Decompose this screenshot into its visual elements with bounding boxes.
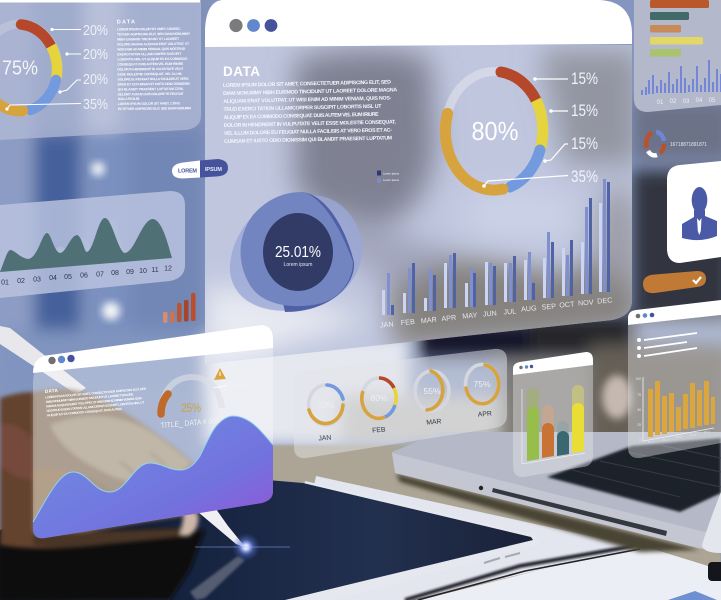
- capsule bars: [527, 385, 584, 461]
- small orange bars: [163, 293, 196, 323]
- laptop: [392, 432, 721, 581]
- data text block: NULLA FACILISI.: [118, 97, 140, 101]
- small donut with number: 16718871891871: [670, 142, 707, 148]
- month labels: SEP: [541, 301, 557, 312]
- main glass body: [205, 45, 640, 370]
- month numbers: 08: [111, 270, 119, 277]
- lorem ipsum paragraph: ALIQUIP EX EA COMMODO CONSEQUAT. DUIS AUTEM VEL EUM IRIURE: [224, 112, 379, 121]
- month labels: AUG: [521, 303, 537, 314]
- blob chart 25.01%: Lorem ipsum: [284, 262, 312, 268]
- month numbers: 03: [33, 276, 41, 284]
- month numbers: 01: [1, 280, 9, 286]
- data text block: DATA: [117, 19, 135, 26]
- month numbers: 09: [126, 269, 134, 276]
- month numbers: 05: [64, 274, 72, 281]
- month numbers: 11: [151, 267, 159, 274]
- axis numbers: 04: [696, 98, 703, 104]
- donut values: 80%: [370, 393, 388, 403]
- legend: [377, 170, 400, 183]
- lorem ipsum paragraph: TRUD EXERCI TATION ULLAMCORPER SUSCIPIT LOBORTIS NISL UT: [223, 104, 382, 113]
- month numbers: 04: [49, 275, 57, 282]
- data text block: WISI ENIM AD MINIM VENIAM, QUIS NOSTRUD: [117, 47, 186, 51]
- donut leaders and percentages: 20%: [83, 23, 108, 39]
- axis numbers: 02: [670, 99, 677, 105]
- gauge title: TITLE_ DATA # 001: [160, 416, 220, 430]
- area outline: [33, 416, 273, 522]
- data text: DIAM NONUMMY NIBH EUISMOD TINCIDUNT UT LAOREET DOLORE: [46, 392, 134, 404]
- panel: teal area chart: [0, 191, 185, 298]
- data text block: EROS ET ACCUMSAN ET IUSTO ODIO DIGNISSIM: [118, 82, 190, 86]
- mini bar chart: [641, 60, 721, 95]
- monthly bar chart: [380, 179, 613, 330]
- window dots: [48, 355, 75, 364]
- month numbers: 12: [164, 266, 172, 272]
- value 100010: 100010: [228, 381, 248, 389]
- donut values: 55%: [423, 386, 441, 396]
- data text block: ECTETUER ADIPISCING ELIT, SED DIAM NONUMM: [118, 106, 191, 111]
- data text block: NIBH EUISMOD TINCIDUNT UT LAOREET: [117, 37, 179, 41]
- hand: [0, 389, 198, 548]
- header bar: [205, 0, 632, 47]
- axis numbers: 01: [657, 100, 664, 106]
- month labels: NOV: [578, 297, 594, 308]
- legend: Lorem ipsum: [383, 172, 400, 176]
- axis: [522, 389, 585, 464]
- data text: ALIQUIP EX EA COMMODO CONSEQUAT. DUIS AUTEM: [47, 407, 122, 417]
- small donut with number: [646, 132, 707, 155]
- month labels: MAY: [462, 310, 478, 321]
- gold bars: [648, 381, 715, 437]
- window dots: [636, 313, 654, 318]
- area series back: [0, 219, 172, 272]
- panel: monthly donuts: [294, 349, 507, 458]
- header bar: [33, 325, 273, 373]
- gauge: [160, 377, 222, 416]
- donut leaders and percentages: 15%: [571, 134, 598, 153]
- dark bars: [391, 182, 610, 315]
- stylus: [0, 326, 246, 548]
- data text block: DOLOR IN HENDRERIT IN VULPUTATE VELIT: [117, 67, 183, 71]
- donut leaders and percentages: 35%: [83, 97, 108, 113]
- data text block: LOREM IPSUM DOLOR SIT AMET, CONS: [118, 101, 181, 106]
- month labels: JAN: [318, 434, 332, 443]
- lorem ipsum paragraph: CUMSAN ET IUSTO ODIO DIGNISSIM QUI BLANDIT PRAESENT LUPTATUM: [224, 135, 392, 145]
- donut leaders and percentages: [482, 69, 598, 188]
- light bars: [382, 203, 602, 315]
- lorem ipsum paragraph: VEL ILLUM DOLORE EU FEUGIAT NULLA FACILISIS AT VERO EROS ET AC-: [224, 127, 392, 137]
- data text: DATA: [45, 388, 59, 394]
- data text block: DOLORE EU FEUGIAT NULLA FACILISIS AT VERO: [117, 77, 189, 81]
- blob chart 25.01%: [230, 192, 363, 312]
- axis numbers: 25: [637, 423, 641, 427]
- month labels: JUN: [482, 308, 497, 319]
- data text: LOREM IPSUM DOLOR SIT AMET, CONSECTETUER ADIPISCING ELIT, SED: [45, 387, 147, 399]
- legend: Lorem ipsum: [383, 178, 400, 182]
- data text block: QUI BLANDIT PRAESENT LUPTATUM ZZRIL: [118, 87, 184, 91]
- month labels: APR: [478, 410, 492, 419]
- window dots: [229, 19, 277, 32]
- tick labels: PT. 1: [648, 440, 655, 444]
- axis numbers: 05: [709, 98, 716, 104]
- stylus glow: [195, 533, 290, 561]
- blob chart 25.01%: 25.01%: [275, 244, 321, 261]
- header bar: [513, 352, 593, 375]
- horizontal bars: [650, 0, 709, 56]
- donut leaders and percentages: 20%: [83, 72, 108, 88]
- lorem ipsum toggle pill: IPSUM: [205, 167, 222, 173]
- tablet: [0, 470, 539, 600]
- month labels: MAR: [426, 418, 442, 427]
- month labels: FEB: [400, 317, 415, 327]
- donut JAN: [308, 385, 344, 425]
- month labels: DEC: [597, 295, 613, 306]
- finger tones inside window: [33, 389, 198, 534]
- tick labels: PT. 4: [690, 433, 697, 437]
- area series front: [0, 218, 172, 272]
- donut leaders and percentages: [5, 23, 108, 113]
- month numbers: 06: [80, 272, 88, 280]
- donut values: 75%: [473, 379, 491, 389]
- axis: [643, 377, 714, 441]
- tick labels: [648, 430, 711, 444]
- donut leaders and percentages: 35%: [571, 167, 598, 186]
- donut chart 80%: [445, 72, 543, 190]
- lorem ipsum toggle pill: [172, 159, 228, 178]
- profile card: [667, 161, 721, 263]
- header bar: [628, 300, 721, 325]
- desk and paper: [270, 445, 721, 600]
- donut MAR: [415, 371, 449, 411]
- month labels: [380, 295, 613, 330]
- panel: main dashboard window: [205, 0, 640, 370]
- axis numbers: [636, 377, 641, 442]
- axis numbers: 50: [637, 408, 641, 412]
- data text block: TETUER ADIPISCING ELIT, SED DIAM NONUMMY: [117, 32, 191, 36]
- lorem ipsum paragraph: DOLOR IN HENDRERIT IN VULPUTATE VELIT ESSE MOLESTIE CONSEQUAT,: [224, 119, 396, 129]
- data text block: DOLORE MAGNA ALIQUAM ERAT VOLUTPAT. UT: [117, 42, 189, 46]
- lorem ipsum paragraph: DIAM NONUMMY NIBH EUISMOD TINCIDUNT UT LAOREET DOLORE MAGNA: [223, 87, 397, 97]
- month labels: MAR: [420, 315, 437, 325]
- data text block: [117, 19, 192, 111]
- panel: gold bar window: [628, 300, 721, 458]
- donut chart 75%: [0, 24, 58, 112]
- data text: MAGNA ALIQUAM ERAT VOLUTPAT. UT WISI ENIM AD MINIM VENIAM, QUIS: [46, 396, 142, 408]
- leader to 100010: [213, 386, 227, 388]
- data text block: LOREM IPSUM DOLOR SIT AMET, CONSEC-: [117, 27, 181, 31]
- mid bars: [387, 179, 606, 315]
- month labels: FEB: [372, 426, 386, 435]
- donut values: [317, 379, 491, 410]
- lorem ipsum paragraph: [223, 79, 398, 145]
- panel: bottom left window: [33, 325, 273, 538]
- axis numbers: 0: [639, 438, 641, 442]
- data text block: LOBORTIS NISL UT ALIQUIP EX EA COMMODO: [117, 57, 188, 61]
- donut leaders and percentages: 15%: [571, 69, 598, 88]
- month labels: JUL: [503, 306, 517, 317]
- axis numbers: 03: [683, 99, 690, 105]
- month numbers: 10: [139, 268, 147, 275]
- list lines: [637, 333, 697, 358]
- panel: top right bars card: [634, 0, 721, 112]
- check mark: [693, 277, 701, 283]
- data text block: ESSE MOLESTIE CONSEQUAT, VEL ILLUM: [117, 72, 182, 76]
- donut leaders and percentages: 15%: [571, 101, 598, 120]
- lorem ipsum paragraph: ALIQUAM ERAT VOLUTPAT. UT WISI ENIM AD MINIM VENIAM, QUIS NOS-: [223, 95, 392, 105]
- month labels: JAN: [380, 319, 394, 330]
- month numbers: [1, 266, 172, 286]
- tick labels: PT. 3: [676, 435, 683, 439]
- data text block: CONSEQUAT. DUIS AUTEM VEL EUM IRIURE: [117, 62, 184, 66]
- panel: capsule bar window: [513, 352, 593, 477]
- purple area chart: [33, 416, 273, 538]
- month labels: [318, 410, 492, 443]
- orange status pill: [643, 271, 706, 293]
- donut leaders and percentages: 20%: [83, 47, 108, 63]
- donut value 80%: 80%: [472, 116, 518, 146]
- keyboard: [547, 438, 721, 512]
- month numbers: 07: [96, 272, 104, 278]
- month labels: APR: [441, 313, 457, 323]
- data text: [45, 380, 149, 417]
- data text block: EXERCITATION ULLAMCORPER SUSCIPIT: [117, 52, 181, 56]
- lorem ipsum paragraph: LOREM IPSUM DOLOR SIT AMET, CONSECTETUER ADIPISCING ELIT, SED: [223, 79, 391, 89]
- tick labels: PT. 5: [704, 430, 711, 434]
- axis numbers: 75: [637, 393, 641, 397]
- window dots: [519, 365, 533, 369]
- data text block: DELENIT AUGUE DUIS DOLORE TE FEUGAIT: [118, 92, 184, 96]
- month labels: OCT: [559, 299, 575, 310]
- donut value 75%: 75%: [2, 58, 38, 80]
- lorem ipsum toggle pill: LOREM: [178, 168, 197, 174]
- data text: NOSTRUD EXERCI TATION ULLAMCORPER SUSCIPIT LOBORTIS NISL UT: [46, 400, 144, 413]
- axis numbers: 100: [636, 377, 641, 381]
- panel: top left glass card: [0, 0, 201, 140]
- tick labels: PT. 2: [662, 438, 669, 442]
- icon: person silhouette: [682, 187, 717, 240]
- data heading: DATA: [223, 64, 260, 79]
- donut FEB: [362, 378, 396, 418]
- donut APR: [466, 364, 499, 404]
- donut values: 50%: [317, 400, 335, 410]
- axis numbers: [657, 98, 716, 106]
- month numbers: 02: [17, 278, 25, 285]
- gauge value: 25%: [181, 403, 201, 415]
- icon: warning triangle: [214, 368, 226, 380]
